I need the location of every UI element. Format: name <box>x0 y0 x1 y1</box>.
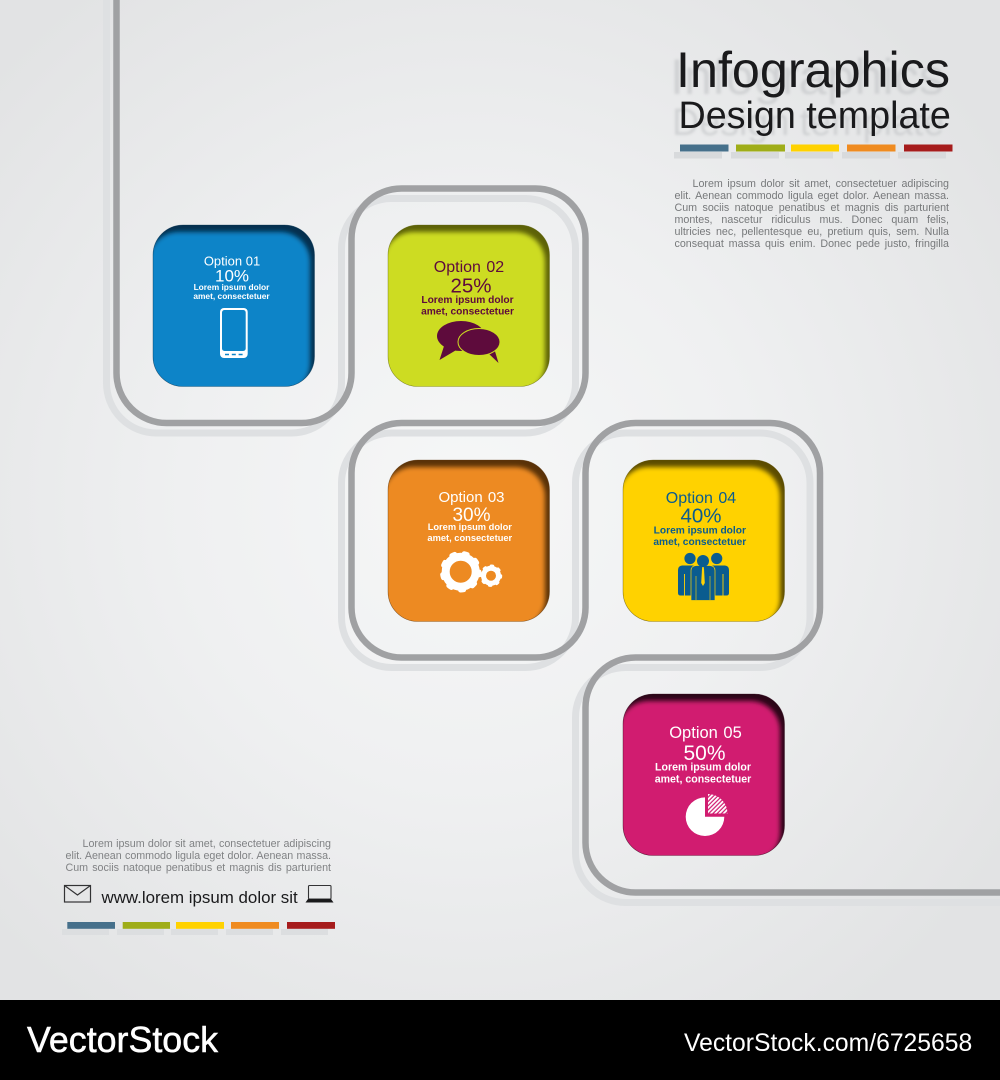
option 05 heading: Option 05 <box>669 724 742 742</box>
header colour bars shadow <box>674 152 946 158</box>
black footer band <box>0 1000 1000 1080</box>
option 05 description: amet, consectetuer <box>655 774 751 786</box>
panel: option 05 <box>618 694 784 862</box>
option 01 description: amet, consectetuer <box>193 291 270 301</box>
option 02 description: amet, consectetuer <box>421 306 514 318</box>
text block: footer paragraph: Cum sociis natoque penatibus et magnis dis parturient <box>66 862 331 874</box>
text block: footer paragraph: Lorem ipsum dolor sit amet, consectetuer adipiscing <box>82 838 331 850</box>
panel: option 02 <box>384 225 550 394</box>
option 02 heading: Option 02 <box>434 259 504 276</box>
option 04 description: amet, consectetuer <box>653 537 746 548</box>
option 05 percent: 50% <box>683 742 726 765</box>
option 04 percent: 40% <box>680 504 722 528</box>
option 02 description: Lorem ipsum dolor <box>421 295 514 306</box>
text block: intro paragraph: ultricies nec, pellentesque eu, pretium quis, sem. Nulla <box>674 226 949 238</box>
option 03 description: Lorem ipsum dolor <box>428 522 512 532</box>
title shadow: Design template <box>672 101 944 143</box>
text block: intro paragraph: Lorem ipsum dolor sit amet, consectetuer adipiscing <box>692 178 949 190</box>
website text: www.lorem ipsum dolor sit <box>100 888 298 907</box>
option 03 percent: 30% <box>452 505 491 526</box>
title shadow <box>670 48 944 143</box>
icon: team <box>678 553 729 600</box>
text block: footer paragraph <box>66 838 331 874</box>
connector line <box>116 0 1000 892</box>
panel: option 01 <box>148 225 314 394</box>
text block: footer paragraph: elit. Aenean commodo ligula eget dolor. Aenean massa. <box>66 850 331 862</box>
icon: envelope <box>64 886 90 902</box>
option 04 heading: Option 04 <box>666 490 736 507</box>
title: Design template <box>678 94 951 136</box>
title shadow: Infographics <box>670 48 944 105</box>
text block: intro paragraph: consequat massa quis enim. Donec pede justo, fringilla <box>674 238 949 250</box>
VectorStock image reference: VectorStock.com/6725658 <box>684 1030 972 1057</box>
title: Infographics <box>676 41 950 98</box>
icon: smartphone <box>220 308 248 358</box>
option 01 percent: 10% <box>215 266 249 286</box>
title <box>676 41 951 136</box>
text block: intro paragraph: elit. Aenean commodo ligula eget dolor. Aenean massa. <box>674 190 949 202</box>
footer colour bars <box>67 922 335 929</box>
option 04 description: Lorem ipsum dolor <box>654 526 746 536</box>
option 03 heading: Option 03 <box>438 489 505 506</box>
icon: gears <box>442 553 501 590</box>
option 03 description: amet, consectetuer <box>427 533 513 543</box>
option 05 description: Lorem ipsum dolor <box>655 762 751 774</box>
text block: intro paragraph: montes, nascetur ridiculus mus. Donec quam felis, <box>674 214 949 226</box>
header colour bars <box>680 144 952 152</box>
option 01 description: Lorem ipsum dolor <box>194 282 270 292</box>
footer colour bars shadow <box>62 929 328 935</box>
panel: option 04 <box>618 460 784 628</box>
VectorStock logo: VectorStock <box>27 1020 218 1060</box>
option 02 percent: 25% <box>450 274 492 298</box>
text block: intro paragraph <box>674 178 949 250</box>
text block: intro paragraph: Cum sociis natoque penatibus et magnis dis parturient <box>674 202 949 214</box>
icon: speech bubbles <box>437 321 500 363</box>
icon: laptop <box>306 886 334 902</box>
panel: option 03 <box>384 460 550 628</box>
connector line shadow <box>106 0 1000 902</box>
option 01 heading: Option 01 <box>204 254 260 268</box>
icon: pie chart <box>686 794 728 836</box>
